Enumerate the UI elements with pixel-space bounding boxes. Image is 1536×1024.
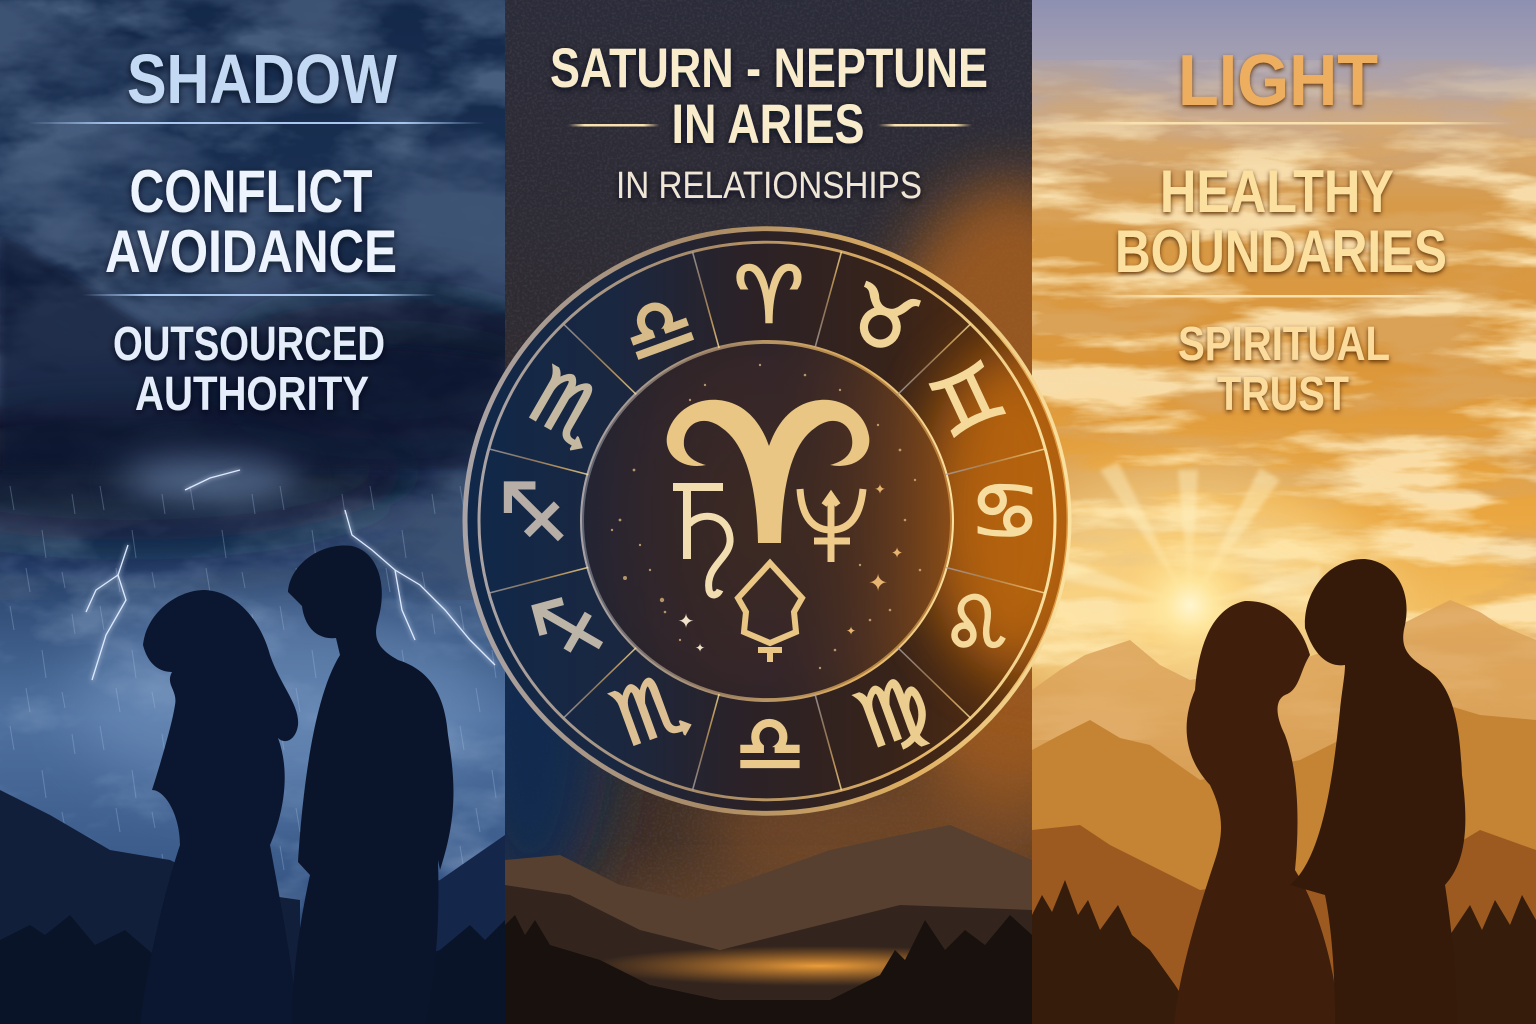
stars and speckles (611, 364, 921, 669)
icon: lightning bolts (86, 470, 495, 680)
figure: man silhouette (288, 546, 453, 1024)
icon: sun rays (1065, 461, 1322, 653)
stars and speckles: ✦ (678, 609, 694, 633)
icon: lower glyph (738, 563, 802, 662)
zodiac signs ring: ♎ (735, 700, 805, 790)
icon: large Aries glyph (667, 400, 869, 543)
zodiac signs ring: ♌ (926, 573, 1023, 681)
zodiac signs ring: ♊ (918, 345, 1019, 456)
text: spiritual trust (1178, 318, 1390, 421)
text: spiritual trust: SPIRITUAL (1178, 318, 1390, 371)
text: spiritual trust: TRUST (1217, 368, 1349, 421)
text: conflict avoidance: AVOIDANCE (105, 218, 397, 285)
stars and speckles: ✦ (891, 544, 903, 562)
zodiac signs ring: ♈ (734, 251, 804, 341)
stars and speckles: ✦ (846, 624, 856, 638)
figure: man silhouette (1290, 559, 1465, 1024)
divider: light top (1052, 122, 1512, 124)
icon: Saturn glyph (673, 485, 730, 595)
stars and speckles: ✦ (695, 641, 705, 655)
zodiac wheel (465, 229, 1102, 813)
text: conflict avoidance: CONFLICT (130, 158, 372, 225)
subtitle: in relationships: IN RELATIONSHIPS (616, 165, 922, 207)
zodiac signs ring: ♐ (517, 580, 622, 671)
heading: shadow: SHADOW (127, 40, 397, 118)
text: outsourced authority: OUTSOURCED (113, 318, 385, 371)
text: healthy boundaries: BOUNDARIES (1115, 218, 1447, 285)
wheel: rings and spokes (465, 229, 1102, 813)
text: healthy boundaries: HEALTHY (1160, 158, 1394, 225)
icon: Neptune glyph (800, 489, 863, 562)
panel: light (990, 0, 1536, 1024)
dividers: title (568, 124, 972, 126)
zodiac signs ring: ♉ (834, 267, 931, 375)
zodiac signs ring: ♏ (514, 351, 619, 464)
title: Saturn - Neptune in Aries: SATURN - NEPTUNE (550, 36, 988, 99)
text: outsourced authority (113, 318, 385, 421)
text: conflict avoidance (105, 158, 397, 285)
heading: light: LIGHT (1178, 41, 1378, 121)
panel: center (505, 0, 1032, 1000)
zodiac signs ring (491, 251, 1040, 790)
text: healthy boundaries (1115, 158, 1447, 285)
landscape: mountains (1032, 600, 1536, 1024)
title: Saturn - Neptune in Aries (550, 36, 988, 155)
stars and speckles: ✦ (868, 569, 888, 597)
divider: light lower (1088, 295, 1468, 298)
zodiac signs ring: ♐ (491, 476, 581, 546)
title: Saturn - Neptune in Aries: IN ARIES (672, 92, 864, 155)
zodiac signs ring: ♏ (602, 657, 699, 765)
figure: woman silhouette (140, 590, 298, 1024)
panel: shadow (0, 0, 505, 1024)
zodiac signs ring: ♋ (970, 467, 1040, 557)
text: outsourced authority: AUTHORITY (135, 368, 369, 421)
figure: woman silhouette (1174, 601, 1340, 1024)
zodiac signs ring: ♍ (845, 659, 942, 767)
divider: shadow lower (82, 294, 437, 296)
landscape: mountains and lake (505, 825, 1050, 1024)
zodiac signs ring: ♎ (610, 274, 707, 382)
divider: shadow top (28, 122, 486, 124)
stars and speckles: ✦ (874, 482, 886, 498)
